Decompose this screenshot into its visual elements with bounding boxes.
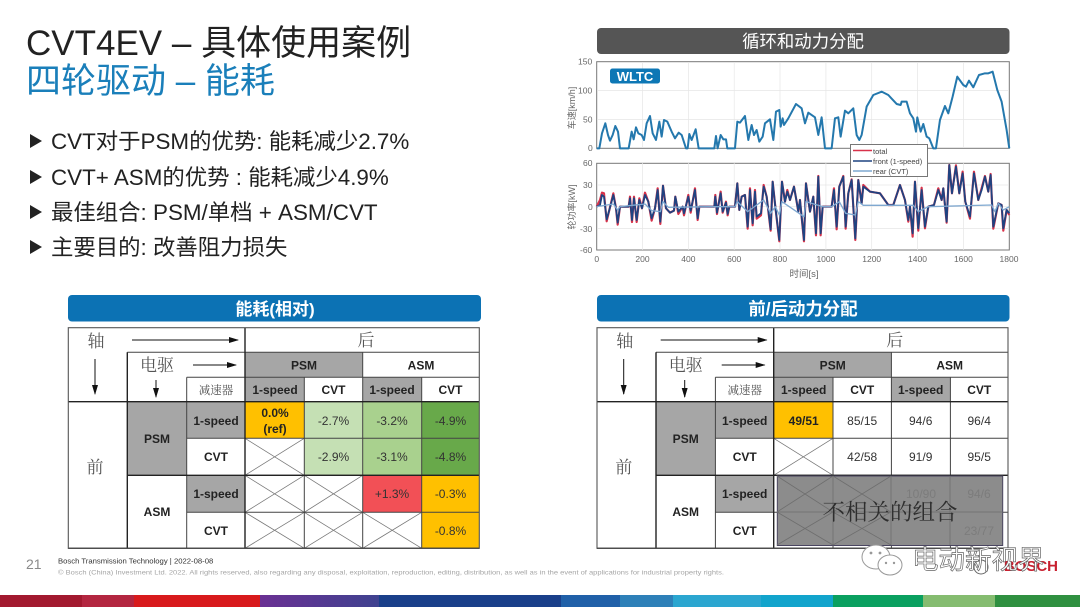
table: energy consumption bbox=[68, 326, 479, 548]
table: energy consumption: 前 bbox=[86, 453, 104, 478]
table: energy consumption: 1-speed bbox=[369, 383, 415, 397]
bullet list bbox=[30, 129, 409, 260]
table: front/rear power split: CVT bbox=[733, 450, 757, 464]
x axis labels bbox=[594, 254, 1019, 280]
table: energy consumption: -2.7% bbox=[318, 414, 349, 428]
table: front/rear power split bbox=[597, 326, 1008, 548]
header: energy consumption bbox=[68, 295, 481, 322]
bullet list: CVT对于PSM的优势: 能耗减少2.7% bbox=[51, 129, 409, 154]
bullet list: 主要目的: 改善阻力损失 bbox=[51, 235, 287, 260]
table: front/rear power split: 1-speed bbox=[898, 383, 943, 397]
table: front/rear power split: 95/5 bbox=[968, 450, 991, 464]
table: front/rear power split: 电驱 bbox=[669, 351, 703, 376]
table: front/rear power split: 94/6 bbox=[909, 414, 933, 428]
table: front/rear power split: CVT bbox=[733, 524, 757, 538]
table: energy consumption: ASM bbox=[144, 505, 170, 519]
table: front/rear power split: 96/4 bbox=[968, 414, 991, 428]
table: energy consumption: 后 bbox=[358, 326, 374, 351]
table: front/rear power split: 1-speed bbox=[722, 414, 767, 428]
table: front/rear power split: 49/51 bbox=[789, 414, 819, 428]
logo: BOSCH: BOSCH bbox=[1004, 558, 1058, 575]
table: front/rear power split: 前 bbox=[615, 453, 632, 478]
table: energy consumption: -2.9% bbox=[318, 450, 349, 464]
table: front/rear power split: 1-speed bbox=[722, 487, 767, 501]
overlay: irrelevant combinations bbox=[777, 476, 1003, 546]
table: energy consumption: +1.3% bbox=[375, 487, 410, 501]
overlay: irrelevant combinations: 10/90 bbox=[906, 487, 936, 501]
overlay: irrelevant combinations: 94/6 bbox=[967, 487, 991, 501]
table: energy consumption: -4.8% bbox=[435, 450, 466, 464]
x axis labels: 1600 bbox=[954, 254, 973, 264]
x axis labels: 时间[s] bbox=[789, 268, 819, 280]
chart legend: rear (CVT) bbox=[873, 167, 909, 176]
x axis labels: 1800 bbox=[1000, 254, 1019, 264]
table: energy consumption: 电驱 bbox=[140, 351, 174, 376]
table: front/rear power split: PSM bbox=[673, 432, 699, 446]
table: front/rear power split: PSM bbox=[820, 358, 846, 372]
footer text: Bosch Transmission Technology | 2022-08-08 bbox=[58, 556, 213, 566]
x axis labels: 400 bbox=[681, 254, 696, 264]
table: energy consumption: CVT bbox=[438, 383, 463, 397]
table: energy consumption: -4.9% bbox=[435, 414, 466, 428]
table: front/rear power split: 1-speed bbox=[781, 383, 826, 397]
x axis labels: 200 bbox=[635, 254, 650, 264]
chart: wheel power: 60 bbox=[583, 158, 593, 168]
header: front/rear power split bbox=[597, 295, 1010, 322]
table: energy consumption: 1-speed bbox=[193, 414, 239, 428]
chart: wheel power: 0 bbox=[588, 202, 593, 212]
table: front/rear power split: ASM bbox=[672, 505, 699, 519]
color bar bbox=[0, 595, 1080, 607]
watermark: 电动新视界 bbox=[912, 545, 1044, 575]
table: energy consumption: ASM bbox=[408, 358, 434, 372]
chart: wheel power: -60 bbox=[580, 245, 593, 255]
chart: wheel power: -30 bbox=[580, 224, 593, 234]
page number: 21 bbox=[26, 556, 42, 572]
table: energy consumption: 1-speed bbox=[252, 383, 298, 397]
table: front/rear power split: 85/15 bbox=[847, 414, 878, 428]
footer text: © Bosch (China) Investment Ltd. 2022. All rights reserved, also regarding any disposal, exploitation, reproduction, editing, distribution, as well as in the event of applications for industrial property rights. bbox=[58, 568, 724, 576]
chart legend bbox=[850, 144, 928, 176]
table: front/rear power split: 91/9 bbox=[909, 450, 933, 464]
table: energy consumption: 1-speed bbox=[193, 487, 239, 501]
table: energy consumption: CVT bbox=[322, 383, 346, 397]
chart: WLTC speed: 车速[km/h] bbox=[566, 87, 577, 129]
x axis labels: 600 bbox=[727, 254, 742, 264]
table: front/rear power split: 轴 bbox=[616, 327, 633, 352]
table: front/rear power split: CVT bbox=[967, 383, 992, 397]
footer text bbox=[58, 556, 724, 576]
bullet list: 最佳组合: PSM/单档 + ASM/CVT bbox=[51, 200, 378, 225]
table: front/rear power split: 后 bbox=[886, 326, 903, 351]
x axis labels: 800 bbox=[773, 254, 787, 264]
x axis labels: 1000 bbox=[816, 254, 836, 264]
table: front/rear power split: ASM bbox=[936, 358, 963, 372]
table: energy consumption: 0.0% bbox=[261, 406, 289, 420]
chart: wheel power: 轮功率[kW] bbox=[566, 184, 577, 230]
chart: WLTC speed bbox=[566, 56, 1009, 153]
table: energy consumption: (ref) bbox=[263, 422, 287, 436]
table: energy consumption: -0.8% bbox=[435, 524, 466, 538]
chart: WLTC speed: 100 bbox=[578, 86, 592, 96]
title: 四轮驱动 – 能耗 bbox=[26, 62, 275, 101]
header: cycle and power split: 循环和动力分配 bbox=[742, 32, 864, 52]
x axis labels: 0 bbox=[594, 254, 599, 264]
header: energy consumption: 能耗(相对) bbox=[235, 300, 315, 319]
table: energy consumption: 轴 bbox=[88, 327, 104, 352]
label: WLTC: WLTC bbox=[617, 69, 654, 84]
chart: WLTC speed: 0 bbox=[588, 143, 593, 153]
title bbox=[26, 24, 411, 101]
header: front/rear power split: 前/后动力分配 bbox=[748, 299, 858, 319]
x axis labels: 1400 bbox=[908, 254, 927, 264]
header: cycle and power split bbox=[597, 28, 1010, 54]
table: energy consumption: -3.2% bbox=[376, 414, 408, 428]
overlay: irrelevant combinations: 23/77 bbox=[964, 524, 994, 538]
table: front/rear power split: CVT bbox=[850, 383, 875, 397]
chart legend: total bbox=[873, 147, 888, 156]
bullet list: CVT+ ASM的优势 : 能耗减少4.9% bbox=[51, 165, 389, 190]
table: energy consumption: CVT bbox=[204, 524, 229, 538]
chart: wheel power: 30 bbox=[583, 180, 593, 190]
chart: WLTC speed: 50 bbox=[583, 114, 593, 124]
table: front/rear power split: 减速器 bbox=[727, 382, 762, 398]
table: energy consumption: -0.3% bbox=[435, 487, 466, 501]
table: energy consumption: CVT bbox=[204, 450, 229, 464]
table: front/rear power split: 42/58 bbox=[847, 450, 878, 464]
chart: WLTC speed: 150 bbox=[578, 56, 592, 66]
table: energy consumption: PSM bbox=[291, 358, 317, 372]
chart: wheel power bbox=[566, 144, 1019, 280]
table: energy consumption: PSM bbox=[144, 432, 170, 446]
overlay: irrelevant combinations: 不相关的组合 bbox=[822, 495, 958, 527]
table: energy consumption: -3.1% bbox=[376, 450, 408, 464]
x axis labels: 1200 bbox=[862, 254, 881, 264]
chart legend: front (1-speed) bbox=[873, 157, 923, 166]
title: CVT4EV – 具体使用案例 bbox=[26, 24, 411, 63]
table: energy consumption: 减速器 bbox=[199, 382, 234, 398]
